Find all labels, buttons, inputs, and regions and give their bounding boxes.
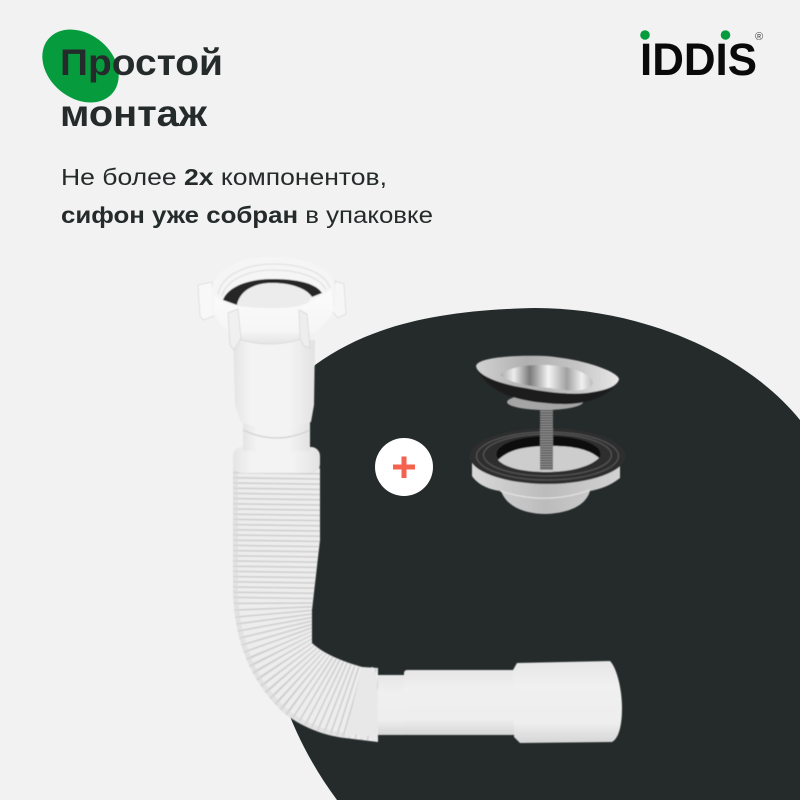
straight tube bbox=[378, 675, 406, 735]
logo: IDDIS: IDDIS bbox=[640, 34, 757, 85]
nut thread bbox=[218, 264, 330, 296]
connector collar bbox=[233, 447, 320, 473]
nut front lugs bbox=[228, 309, 241, 350]
rubber gasket bbox=[223, 279, 322, 305]
strainer base body bbox=[472, 462, 620, 514]
drain strainer bbox=[470, 356, 626, 514]
corrugated hose bbox=[232, 467, 379, 743]
dark background shape bbox=[262, 308, 800, 800]
description text: сифон уже собран в упаковке bbox=[61, 202, 433, 228]
narrow neck bbox=[243, 415, 310, 451]
title bbox=[60, 42, 223, 134]
strainer bowl bbox=[500, 365, 593, 391]
logo: IDDIS: ® bbox=[755, 31, 763, 43]
siphon: flexible drain pipe bbox=[198, 257, 622, 750]
description text bbox=[61, 164, 433, 228]
strainer cap bbox=[476, 356, 619, 404]
green accent blob bbox=[28, 14, 133, 118]
nut body bbox=[212, 257, 335, 344]
plus badge bbox=[375, 438, 433, 496]
nut front wall bbox=[214, 290, 334, 344]
end socket bbox=[513, 661, 622, 743]
hose end rib bbox=[345, 667, 378, 741]
threaded stem bbox=[540, 405, 553, 470]
inner tube bbox=[237, 283, 312, 314]
nut side lugs bbox=[198, 282, 214, 320]
rubber ring bbox=[470, 428, 626, 484]
strainer under plate bbox=[507, 394, 583, 410]
description text: Не более 2х компонентов, bbox=[61, 164, 387, 190]
title: монтаж bbox=[60, 93, 208, 134]
nut bbox=[198, 257, 346, 350]
title: Простой bbox=[60, 42, 223, 83]
upper pipe bbox=[233, 340, 315, 429]
